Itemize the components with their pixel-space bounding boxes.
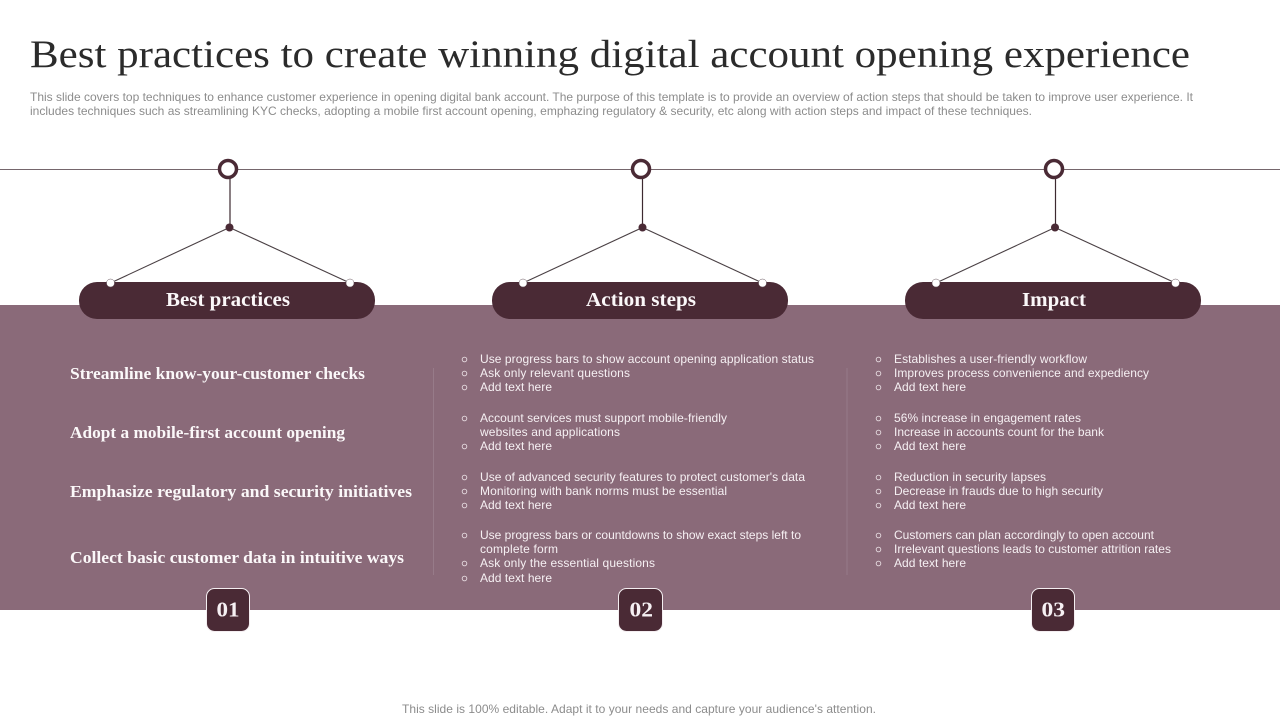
heading pill: best practices: Best practices <box>166 290 290 311</box>
impact list: 56% increase in engagement rates <box>894 411 1081 425</box>
hanger: impact <box>936 160 1176 283</box>
panel: background band <box>0 305 1280 610</box>
impact list: Reduction in security lapses <box>894 470 1046 484</box>
action steps list: Account services must support mobile-friendly <box>480 411 727 425</box>
number badge 01 <box>206 588 250 632</box>
action steps list: Use of advanced security features to protect customer's data <box>480 470 805 484</box>
action steps list <box>462 352 814 585</box>
action steps list: Use progress bars or countdowns to show exact steps left to <box>480 528 801 542</box>
heading pill: best practices <box>79 279 375 319</box>
best practices list: Streamline know-your-customer checks <box>70 364 366 383</box>
action steps list: Add text here <box>480 439 552 453</box>
description text <box>30 90 1194 118</box>
heading pill: impact <box>905 279 1201 319</box>
action steps list: Monitoring with bank norms must be essential <box>480 484 727 498</box>
description text: includes techniques such as streamlining KYC checks, adopting a mobile first account opening, emphazing regulatory & security, etc along with action steps and impact of these techniques. <box>30 104 1032 118</box>
number badge 02 <box>618 588 662 632</box>
number badge 02: 02 <box>630 598 653 622</box>
heading pill: impact: Impact <box>1022 290 1087 311</box>
heading pill: action steps <box>492 279 788 319</box>
action steps list: Use progress bars to show account opening application status <box>480 352 814 366</box>
action steps list: Ask only relevant questions <box>480 366 630 380</box>
heading pill: action steps: Action steps <box>586 290 696 311</box>
best practices list: Emphasize regulatory and security initiatives <box>70 482 413 501</box>
best practices list: Adopt a mobile-first account opening <box>70 423 346 442</box>
impact list: Customers can plan accordingly to open account <box>894 528 1155 542</box>
impact list: Decrease in frauds due to high security <box>894 484 1103 498</box>
impact list: Establishes a user-friendly workflow <box>894 352 1087 366</box>
best practices list: Collect basic customer data in intuitive ways <box>70 548 405 567</box>
description text: This slide covers top techniques to enhance customer experience in opening digital bank account. The purpose of this template is to provide an overview of action steps that should be taken to improve user experience. It <box>30 90 1194 104</box>
footer note: This slide is 100% editable. Adapt it to your needs and capture your audience's attention. <box>402 702 876 716</box>
impact list: Improves process convenience and expediency <box>894 366 1149 380</box>
action steps list: Add text here <box>480 571 552 585</box>
title: Best practices to create winning digital account opening experience <box>30 33 1190 76</box>
hanger: best practices <box>110 160 350 283</box>
number badge 03: 03 <box>1042 598 1065 622</box>
impact list: Add text here <box>894 498 966 512</box>
impact list <box>876 352 1171 570</box>
action steps list: complete form <box>480 542 558 556</box>
impact list: Add text here <box>894 439 966 453</box>
number badge 03 <box>1032 588 1074 632</box>
action steps list: Add text here <box>480 498 552 512</box>
best practices list <box>70 364 413 567</box>
number badge 01: 01 <box>216 598 240 622</box>
impact list: Add text here <box>894 556 966 570</box>
impact list: Irrelevant questions leads to customer attrition rates <box>894 542 1171 556</box>
hanger: action steps <box>523 160 762 283</box>
action steps list: websites and applications <box>479 425 620 439</box>
impact list: Increase in accounts count for the bank <box>894 425 1105 439</box>
action steps list: Add text here <box>480 380 552 394</box>
action steps list: Ask only the essential questions <box>480 556 655 570</box>
impact list: Add text here <box>894 380 966 394</box>
